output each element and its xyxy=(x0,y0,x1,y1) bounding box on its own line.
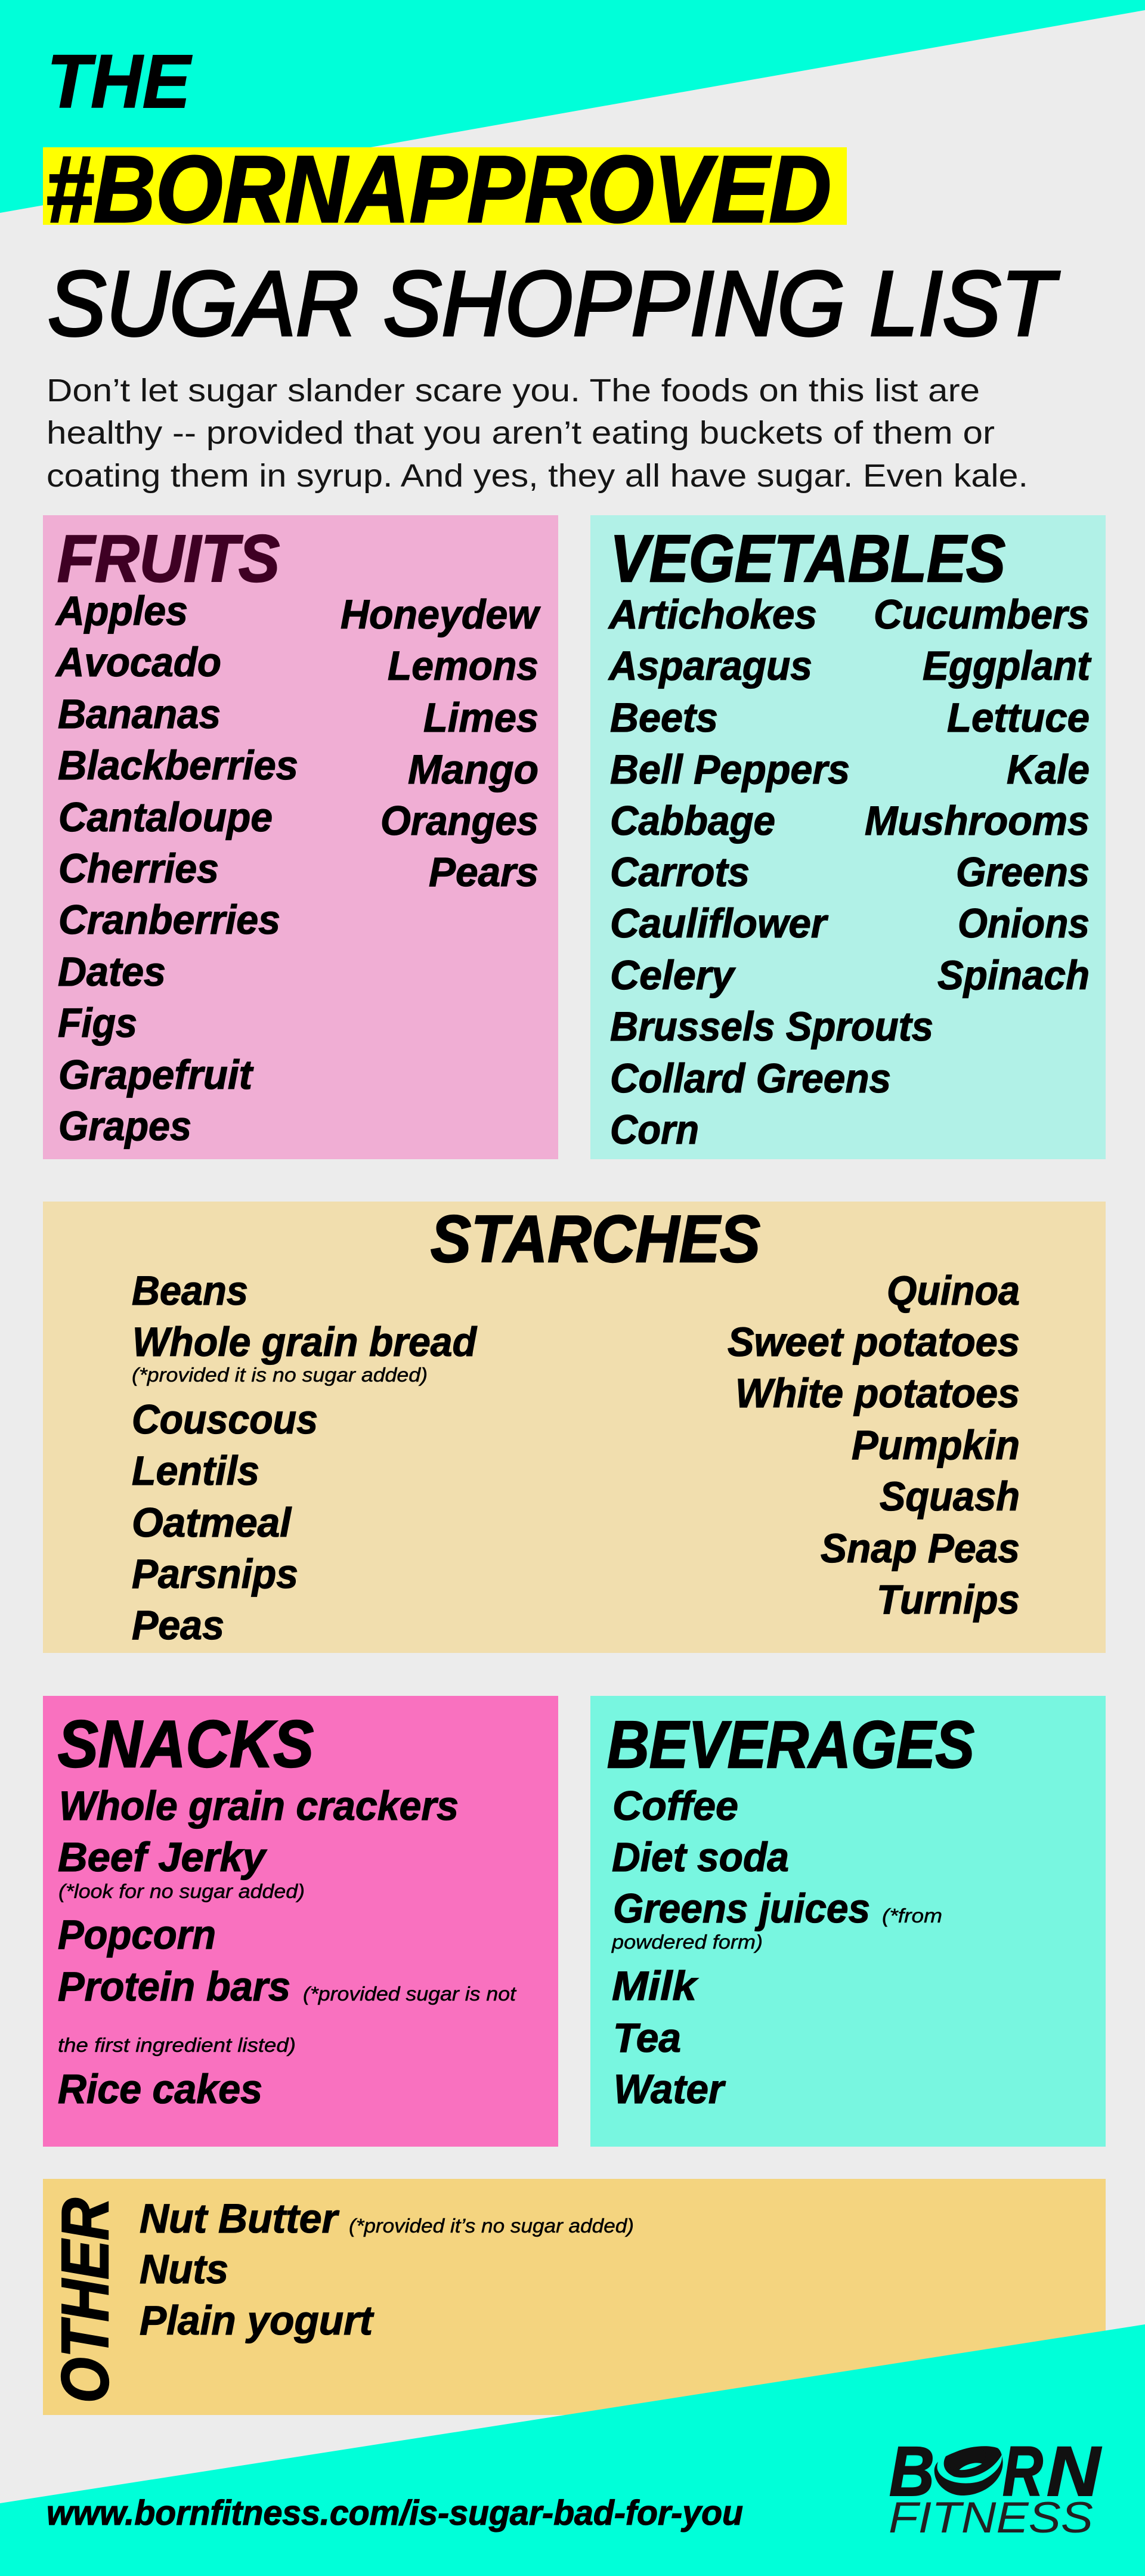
vegetables list right column: Spinach xyxy=(937,952,1090,998)
vegetables list left column: Beets xyxy=(610,695,718,741)
intro paragraph: healthy -- provided that you aren’t eating buckets of them or xyxy=(47,415,995,451)
fruits list left column: Cranberries xyxy=(58,897,280,943)
intro paragraph xyxy=(47,373,1028,494)
top teal wedge xyxy=(0,0,1145,213)
bottom teal wedge xyxy=(0,2324,1145,2576)
fruits list right column: Oranges xyxy=(380,798,539,844)
snacks list: Protein bars xyxy=(58,1964,290,2010)
snacks list: Rice cakes xyxy=(58,2066,262,2112)
intro paragraph: Don’t let sugar slander scare you. The foods on this list are xyxy=(47,373,980,408)
fruits list left column: Dates xyxy=(58,949,166,995)
starches list right column xyxy=(728,1268,1020,1623)
vegetables list right column: Kale xyxy=(1007,747,1090,792)
vegetables list right column: Mushrooms xyxy=(865,798,1090,844)
panel: vegetables xyxy=(590,515,1106,1159)
fruits list left column: Cherries xyxy=(58,846,219,891)
fruits list right column: Lemons xyxy=(388,643,539,689)
logo word FITNESS: FITNESS xyxy=(889,2494,1093,2542)
vegetables list right column: Cucumbers xyxy=(874,592,1090,637)
other list: Nuts xyxy=(140,2246,228,2292)
fruits list left column: Figs xyxy=(58,1000,137,1046)
fruits list left column: Apples xyxy=(55,588,188,634)
vegetables list left column: Celery xyxy=(610,952,736,998)
fruits list right column xyxy=(341,592,541,895)
panel: snacks xyxy=(43,1696,558,2147)
vegetables list right column: Lettuce xyxy=(947,695,1090,741)
snacks list: Popcorn xyxy=(58,1912,216,1958)
title xyxy=(43,39,1060,355)
vegetables list left column: Corn xyxy=(610,1107,699,1153)
panel: beverages xyxy=(590,1696,1106,2147)
starches list right column: Turnips xyxy=(877,1577,1020,1623)
logo: born fitness xyxy=(889,2432,1102,2542)
other list: (*provided it’s no sugar added) xyxy=(349,2215,634,2237)
vegetables list right column: Eggplant xyxy=(923,643,1092,689)
beverages list: powdered form) xyxy=(611,1931,763,1953)
fruits list left column: Cantaloupe xyxy=(58,794,273,840)
vegetables list left column: Brussels Sprouts xyxy=(610,1004,933,1049)
snacks list: (*look for no sugar added) xyxy=(58,1880,305,1902)
vegetables list left column: Carrots xyxy=(610,849,750,895)
beverages list: Greens juices xyxy=(613,1885,870,1931)
vegetables list left column: Artichokes xyxy=(608,592,817,637)
fruits list right column: Mango xyxy=(408,747,539,792)
vegetables list left column: Cauliflower xyxy=(610,900,828,946)
starches list right column: Pumpkin xyxy=(852,1422,1020,1468)
fruits list left column: Avocado xyxy=(55,639,221,685)
vegetables list left column: Cabbage xyxy=(610,798,775,844)
fruits list left column xyxy=(55,588,298,1149)
vegetables list left column: Asparagus xyxy=(608,643,812,689)
vegetables list right column xyxy=(865,592,1092,998)
panel: other xyxy=(43,2179,1106,2415)
starches list right column: Quinoa xyxy=(887,1268,1020,1314)
heading: other (rotated): OTHER xyxy=(48,2198,122,2403)
icon: tire letter O xyxy=(934,2443,1003,2496)
snacks list: Beef Jerky xyxy=(58,1834,268,1880)
starches list right column: Sweet potatoes xyxy=(728,1319,1020,1365)
vegetables list left column: Collard Greens xyxy=(610,1055,891,1101)
title highlight: #BORNAPPROVED: #BORNAPPROVED xyxy=(45,136,831,242)
beverages list: Coffee xyxy=(612,1783,738,1829)
fruits list right column: Honeydew xyxy=(341,592,541,637)
footer url: www.bornfitness.com/is-sugar-bad-for-you xyxy=(47,2494,743,2532)
beverages list xyxy=(611,1783,942,2112)
snacks list: (*provided sugar is not xyxy=(303,1983,517,2005)
beverages list: Tea xyxy=(613,2015,681,2061)
snacks list xyxy=(58,1783,517,2112)
starches list left column: Peas xyxy=(132,1602,224,1648)
starches list left column: Whole grain bread xyxy=(132,1319,478,1365)
starches list left column: (*provided it is no sugar added) xyxy=(132,1364,428,1386)
intro paragraph: coating them in syrup. And yes, they all have sugar. Even kale. xyxy=(47,458,1028,494)
other list: Nut Butter xyxy=(140,2196,339,2241)
heading: beverages: BEVERAGES xyxy=(607,1708,974,1782)
heading: vegetables: VEGETABLES xyxy=(610,522,1005,596)
starches list left column: Parsnips xyxy=(132,1551,298,1597)
heading: starches: STARCHES xyxy=(431,1202,760,1276)
title line: THE: THE xyxy=(47,39,193,123)
vegetables list left column: Bell Peppers xyxy=(610,747,850,792)
fruits list left column: Bananas xyxy=(58,691,221,737)
fruits list left column: Blackberries xyxy=(58,742,298,788)
beverages list: Water xyxy=(614,2066,726,2112)
vegetables list right column: Greens xyxy=(956,849,1090,895)
starches list right column: Snap Peas xyxy=(821,1525,1020,1571)
logo wordmark letters B R N: B xyxy=(889,2432,934,2511)
starches list left column: Couscous xyxy=(132,1397,318,1442)
starches list left column: Lentils xyxy=(132,1448,259,1494)
other list: Plain yogurt xyxy=(140,2298,375,2343)
fruits list right column: Limes xyxy=(423,695,539,741)
beverages list: Milk xyxy=(612,1963,699,2009)
fruits list right column: Pears xyxy=(429,849,539,895)
heading: snacks: SNACKS xyxy=(58,1707,314,1781)
other list xyxy=(140,2196,634,2343)
snacks list: Whole grain crackers xyxy=(59,1783,459,1829)
vegetables list right column: Onions xyxy=(958,900,1090,946)
fruits list left column: Grapefruit xyxy=(58,1052,254,1098)
fruits list left column: Grapes xyxy=(58,1103,191,1149)
logo wordmark letters B R N: N xyxy=(1047,2432,1102,2511)
panel: fruits xyxy=(43,515,558,1159)
title line: sugar shopping list: SUGAR SHOPPING LIST xyxy=(48,252,1060,355)
beverages list: Diet soda xyxy=(612,1834,789,1880)
logo wordmark letters B R N xyxy=(889,2432,1102,2511)
starches list left column: Oatmeal xyxy=(132,1500,292,1546)
starches list left column: Beans xyxy=(132,1268,248,1314)
snacks list: the first ingredient listed) xyxy=(58,2034,296,2056)
starches list right column: White potatoes xyxy=(735,1370,1020,1416)
vegetables list left column xyxy=(608,592,933,1153)
starches list left column xyxy=(132,1268,478,1648)
starches list right column: Squash xyxy=(880,1473,1020,1519)
heading: fruits: FRUITS xyxy=(57,522,280,596)
beverages list: (*from xyxy=(882,1905,942,1927)
panel: starches xyxy=(43,1202,1106,1653)
logo wordmark letters B R N: R xyxy=(1002,2432,1043,2511)
